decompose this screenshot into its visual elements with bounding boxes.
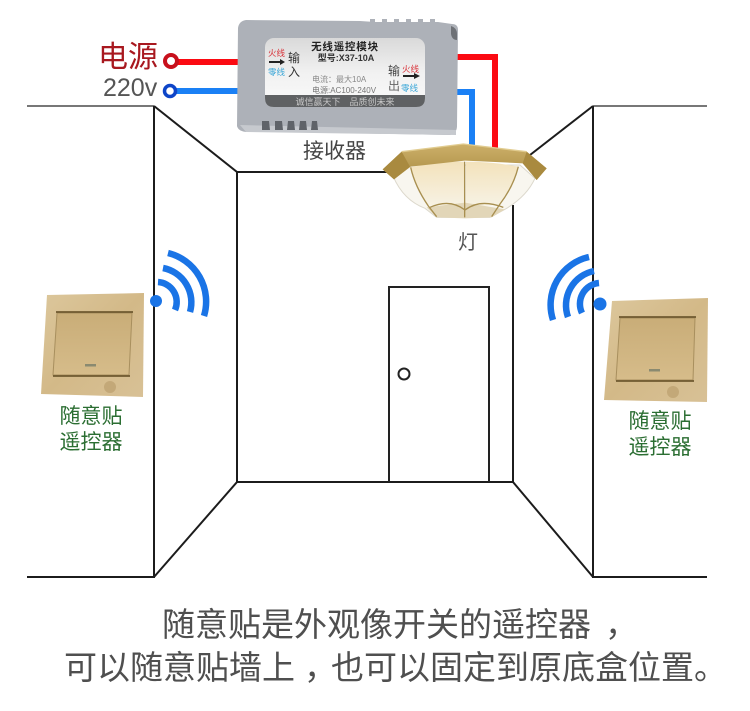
- bottom description: 可以随意贴墙上: [64, 649, 295, 686]
- lamp caption: 灯: [458, 231, 478, 254]
- left switch caption: [60, 405, 122, 454]
- wires and power terminals: [164, 55, 495, 150]
- logo: [104, 381, 116, 393]
- input label: 入: [288, 65, 300, 79]
- bottom description: ，: [605, 606, 638, 643]
- module body: [237, 20, 458, 135]
- output label: 火线: [402, 64, 420, 74]
- output label: [388, 63, 420, 93]
- slogan: 诚信赢天下 品质创未来: [295, 96, 395, 107]
- switch plate: [41, 293, 144, 397]
- signal dot: [594, 298, 606, 310]
- right wall switch: [604, 298, 708, 402]
- bottom description: [64, 606, 727, 686]
- label dark strip: [265, 95, 425, 107]
- output label: 零线: [401, 83, 419, 93]
- current spec: 电流：最大10A: [312, 74, 367, 84]
- 220v: 220v: [103, 74, 158, 102]
- wireless signal right: [551, 257, 606, 320]
- output label: 出: [388, 79, 400, 93]
- blue terminal: [164, 86, 176, 96]
- switch button: [53, 313, 132, 375]
- room line drawing: [27, 106, 707, 577]
- red terminal: [165, 55, 177, 67]
- 电源: 电源: [98, 41, 158, 74]
- indicator: [649, 369, 660, 372]
- indicator: [85, 364, 96, 366]
- switch plate: [604, 298, 708, 402]
- switch button: [616, 318, 695, 380]
- door: [389, 287, 489, 482]
- left switch caption: 遥控器: [60, 431, 122, 454]
- bottom description: ，: [304, 649, 337, 686]
- lamp brass rim: [383, 144, 547, 180]
- label plate: [265, 38, 425, 107]
- wireless signal left: [150, 253, 206, 316]
- voltage spec: 电源:AC100-240V: [312, 85, 377, 95]
- right switch caption: 遥控器: [628, 436, 692, 459]
- right switch caption: [628, 410, 692, 459]
- receiver module: [237, 19, 458, 135]
- left switch caption: 随意贴: [60, 405, 122, 428]
- label title: 无线遥控模块: [311, 40, 379, 53]
- ceiling lamp: [383, 144, 547, 218]
- lamp glass bowl: [393, 165, 535, 217]
- logo: [667, 386, 679, 398]
- neutral wire: [176, 91, 472, 148]
- model number: 型号:X37-10A: [318, 52, 375, 63]
- output label: 输: [388, 63, 400, 78]
- bottom description: 也可以固定到原底盒位置。: [331, 649, 727, 686]
- input label: 输: [288, 50, 300, 65]
- vents and notches: [370, 19, 435, 24]
- power label: [98, 41, 158, 102]
- receiver caption: 接收器: [303, 140, 366, 163]
- left wall switch: [41, 293, 144, 397]
- input label: 火线: [268, 48, 286, 58]
- signal dot: [150, 295, 162, 307]
- bottom description: 随意贴是外观像开关的遥控器: [162, 606, 591, 643]
- input label: [268, 48, 300, 79]
- input label: 零线: [268, 67, 286, 77]
- live wire: [178, 57, 495, 150]
- door knob: [398, 368, 410, 380]
- right switch caption: 随意贴: [628, 410, 692, 433]
